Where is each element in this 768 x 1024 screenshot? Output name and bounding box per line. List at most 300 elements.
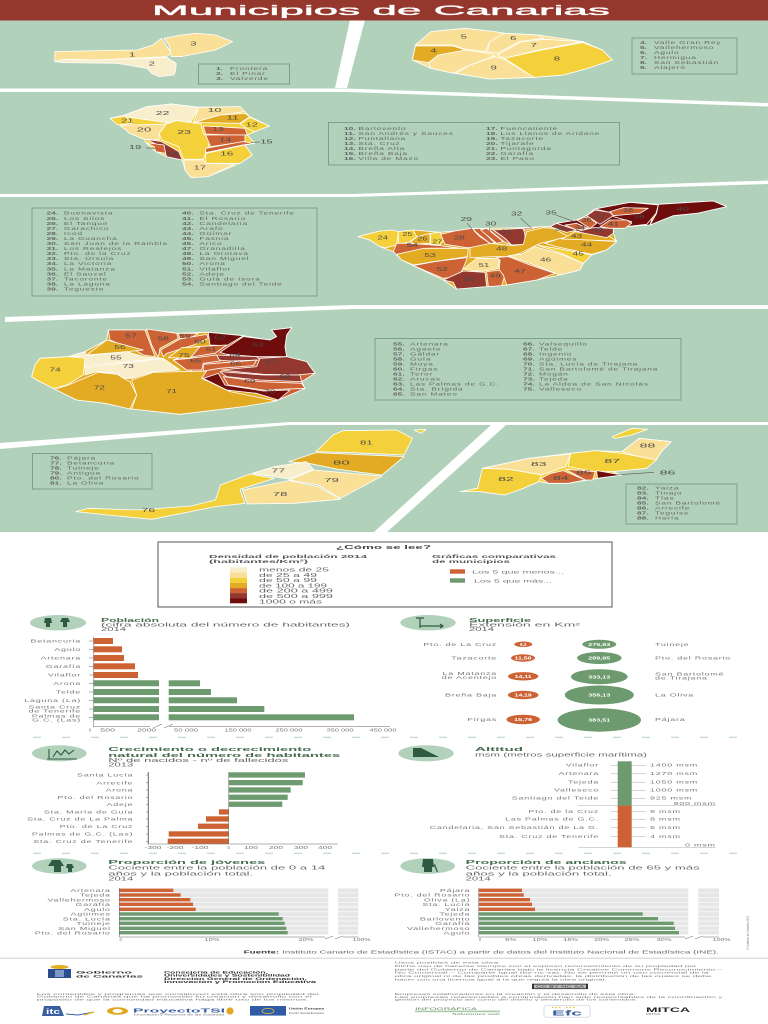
key: Gran Canaria: Agüimes bbox=[539, 357, 577, 362]
key: Tenerife: 39. bbox=[46, 287, 58, 292]
key: Lanzarote: Yaiza bbox=[655, 487, 679, 491]
right labels: La Oliva bbox=[655, 694, 694, 698]
axis values: 100% bbox=[713, 937, 731, 942]
key: La Palma: Tazacorte bbox=[500, 137, 544, 141]
key: El Hierro: 1. bbox=[216, 67, 223, 71]
key: Gran Canaria: Sta. Lucía de Tirajana bbox=[539, 362, 638, 367]
axis values: 5% bbox=[505, 937, 516, 942]
key: Tenerife: 33. bbox=[46, 257, 58, 261]
footer: Gobierno de Canarias: Universidades y Sostenibilidad bbox=[164, 973, 290, 977]
key: Tenerife: San Miguel bbox=[199, 257, 249, 261]
map background with white dividers bbox=[0, 20, 768, 532]
labels: Pájara bbox=[440, 889, 470, 893]
map: Fuerteventura: 80 bbox=[333, 460, 351, 466]
key: Tenerife: 45. bbox=[182, 237, 194, 241]
map: Tenerife: 49 bbox=[489, 273, 501, 279]
map: La Palma: 23 bbox=[177, 130, 192, 136]
altitude column bbox=[578, 761, 716, 847]
right labels: Tuineje bbox=[655, 643, 689, 647]
key: Fuerteventura: 79. bbox=[50, 471, 62, 476]
footer: Gobierno de Canarias: Gobierno bbox=[76, 969, 134, 974]
key: Tenerife: 30. bbox=[46, 242, 58, 246]
key: Tenerife: 46. bbox=[182, 242, 194, 246]
map: Tenerife: 39 bbox=[634, 215, 645, 221]
map: Tenerife: 45 bbox=[573, 252, 584, 258]
map: Tenerife: 41 bbox=[608, 222, 619, 228]
key: La Gomera: Agulo bbox=[654, 51, 679, 55]
key: Tenerife: Tegueste bbox=[64, 287, 104, 292]
values: 8 msm bbox=[650, 817, 681, 822]
values: 1000 msm bbox=[650, 789, 698, 793]
chart: crecimiento bbox=[27, 745, 340, 850]
key: La Gomera: Valle Gran Rey bbox=[654, 41, 721, 45]
key: Tenerife: Santiago del Teide bbox=[199, 282, 283, 287]
map: La Palma: 13 bbox=[212, 127, 225, 133]
logo: Infográfica: Soluciones web bbox=[452, 1012, 501, 1016]
key: La Palma: 10. bbox=[344, 127, 356, 131]
labels: Agüimes bbox=[70, 913, 111, 917]
labels: Vallehermoso bbox=[47, 898, 111, 903]
key: Tenerife: 49. bbox=[182, 257, 194, 261]
key: Gran Canaria: 72. bbox=[523, 372, 535, 377]
key: Gran Canaria: 75. bbox=[523, 387, 535, 392]
key: Tenerife: Fasnia bbox=[199, 237, 229, 241]
axis values: 2000 bbox=[137, 728, 157, 733]
values: 1400 msm bbox=[650, 764, 698, 768]
map: Tenerife: 37 bbox=[595, 215, 605, 221]
badge: creative commons bbox=[532, 984, 588, 989]
footer: uses note: hacer con una licencia igual a la que regula la obra original. bbox=[395, 977, 607, 981]
map: Lanzarote: 84 bbox=[553, 476, 569, 482]
heading: ancianos: Cociente entre la población de 65 y más bbox=[466, 866, 701, 872]
heading: superficie bbox=[469, 618, 581, 633]
icon: slope bbox=[398, 745, 454, 761]
map: Tenerife: 36 bbox=[582, 218, 592, 224]
heading: jóvenes: Proporción de jóvenes bbox=[108, 860, 265, 866]
heading: superficie: Superficie bbox=[469, 618, 533, 624]
key: Gran Canaria: San Bartolomé de Tirajana bbox=[539, 367, 658, 372]
key: Tenerife: 47. bbox=[182, 247, 194, 251]
key: Tenerife: 48. bbox=[182, 252, 194, 256]
map: Tenerife: 34 bbox=[575, 225, 585, 231]
map: El Hierro bbox=[55, 33, 233, 77]
key: Lanzarote: 83. bbox=[637, 492, 649, 496]
footer: ownership note: propósito de que la comunidad educativa haga libre uso de los mismos. bbox=[37, 997, 309, 1001]
key: Tenerife: 25. bbox=[46, 217, 58, 221]
key: Tenerife: 28. bbox=[46, 232, 58, 236]
labels: Santa Cruz bbox=[29, 705, 81, 710]
map: Gran Canaria: 65 bbox=[190, 359, 202, 365]
footer: Gobierno de Canarias bbox=[48, 965, 316, 984]
title bar: Municipios de Canarias bbox=[152, 2, 610, 18]
legend: cómo se lee: de municipios bbox=[432, 559, 511, 565]
map: Tenerife: 46 bbox=[540, 257, 552, 263]
map: Fuerteventura: 79 bbox=[324, 478, 340, 484]
footer: companies note bbox=[395, 992, 724, 1002]
map: Fuerteventura: 76 bbox=[142, 508, 156, 514]
map: Gran Canaria: 62 bbox=[214, 335, 226, 341]
heading: jóvenes: Cociente entre la población de 0 a 14 bbox=[108, 866, 326, 872]
heading: ancianos: 2014 bbox=[466, 876, 491, 882]
labels bbox=[394, 889, 470, 936]
key: Gran Canaria: 62. bbox=[393, 377, 405, 382]
footer: Gobierno de Canarias: de Canarias bbox=[76, 973, 145, 978]
values: 1050 msm bbox=[650, 780, 698, 785]
key: El Hierro: Frontera bbox=[230, 67, 268, 71]
heading: altitud: msm (metros superficie marítima) bbox=[475, 753, 648, 759]
key: Tenerife: Granadilla bbox=[199, 247, 246, 251]
left labels: Tazacorte bbox=[451, 657, 497, 661]
key: La Palma: 15. bbox=[344, 152, 356, 156]
labels: Agulo bbox=[84, 908, 111, 912]
axis values: 50 000 bbox=[174, 728, 199, 733]
key: Gran Canaria: 70. bbox=[523, 362, 535, 367]
key: Tenerife: 31. bbox=[46, 247, 58, 251]
divider dashes bbox=[33, 852, 740, 854]
right labels: Pájara bbox=[655, 718, 685, 722]
key: Tenerife: 36. bbox=[46, 272, 58, 277]
key: Gran Canaria: Firgas bbox=[410, 367, 438, 372]
key: Tenerife: 51. bbox=[182, 267, 194, 272]
key: Gran Canaria: 71. bbox=[523, 367, 535, 372]
map: Gran Canaria: 60 bbox=[194, 340, 206, 346]
key: Tenerife: El Rosario bbox=[199, 217, 246, 221]
legend: cómo se lee: de 50 a 99 bbox=[259, 578, 317, 584]
key: Gran Canaria: 56. bbox=[393, 348, 405, 352]
key: El Hierro: Valverde bbox=[230, 77, 269, 81]
axis values: 0 bbox=[228, 845, 231, 850]
key: Gran Canaria: 68. bbox=[523, 352, 535, 357]
labels: Santa Lucía bbox=[77, 774, 133, 778]
right labels: de Tirajana bbox=[655, 676, 708, 681]
logo: MITCA: MITCA bbox=[646, 1012, 660, 1016]
key: Gran Canaria: 57. bbox=[393, 352, 405, 357]
key: Fuerteventura: Antigua bbox=[67, 471, 101, 476]
key: Tenerife: 26. bbox=[46, 222, 58, 226]
map: Lanzarote: 82 bbox=[498, 477, 515, 483]
map: Gran Canaria: 56 bbox=[114, 345, 126, 351]
key: La Palma: Breña Alta bbox=[358, 147, 405, 151]
key: La Palma: 19. bbox=[486, 137, 498, 141]
axis values: 350 000 bbox=[326, 728, 354, 733]
axis values: 20% bbox=[594, 937, 609, 942]
heading: superficie: Extensión en Km² bbox=[469, 623, 581, 629]
map: El Hierro: 1 bbox=[129, 52, 136, 58]
key: La Gomera: 7. bbox=[640, 56, 647, 60]
key: Gran Canaria: San Mateo bbox=[410, 392, 458, 397]
left labels: de Acentejo bbox=[442, 676, 497, 680]
labels: Pto. de La Cruz bbox=[60, 825, 133, 829]
key: La Gomera: 4. bbox=[640, 41, 647, 45]
labels: Pto. de la Cruz bbox=[528, 810, 599, 814]
labels: Tejeda bbox=[439, 913, 470, 917]
key: Tenerife: Los Realejos bbox=[64, 247, 122, 251]
axis values: 20% bbox=[298, 937, 314, 942]
map: Tenerife: 53 bbox=[424, 253, 436, 259]
key: Tenerife: 50. bbox=[182, 262, 194, 266]
key: Lanzarote: 85. bbox=[637, 502, 649, 506]
labels: Garafía bbox=[75, 903, 111, 907]
bars bbox=[89, 637, 390, 728]
map: Tenerife: 30 bbox=[485, 221, 497, 227]
key: La Gomera: San Sebastián bbox=[654, 61, 719, 65]
map: Gran Canaria: 73 bbox=[123, 364, 134, 370]
key: Fuerteventura bbox=[32, 454, 152, 489]
map: Tenerife: 28 bbox=[454, 236, 465, 242]
key: Tenerife: Tacoronte bbox=[64, 277, 108, 282]
key: Gran Canaria: Mogán bbox=[539, 372, 569, 377]
map: Tenerife: 47 bbox=[514, 269, 526, 275]
footer: Gobierno de Canarias: Dirección General de Ordenación, bbox=[164, 977, 307, 981]
labels: G.C. (Las) bbox=[32, 718, 81, 723]
map: Gran Canaria: 69 bbox=[244, 379, 256, 385]
values: 5 msm bbox=[650, 826, 681, 830]
map: La Gomera: 6 bbox=[510, 36, 517, 42]
key: Tenerife: 54. bbox=[182, 282, 194, 287]
key: Tenerife: Icod bbox=[64, 232, 83, 236]
axis values: 30% bbox=[656, 937, 672, 942]
axis values: 150 000 bbox=[224, 728, 252, 733]
source line: Fuente: Instituto Canario de Estadística (ISTAC) a partir de datos del Instituto Nacional de Estadística (INE). bbox=[244, 950, 719, 954]
heading: población: (cifra absoluta del número de habitantes) bbox=[101, 623, 351, 629]
legend: cómo se lee: Gráficas comparativas bbox=[432, 554, 557, 560]
logo: Proyecto TSI: ProyectoTSI bbox=[133, 1009, 227, 1015]
map: La Palma: 15 bbox=[260, 139, 273, 145]
labels: Palmas de G.C. (Las) bbox=[32, 833, 133, 837]
heading: superficie: 2014 bbox=[469, 627, 494, 633]
key: La Gomera: Hermigua bbox=[654, 56, 697, 60]
map: El Hierro: 2 bbox=[149, 61, 156, 67]
key: Tenerife: San Juan de la Rambla bbox=[64, 242, 168, 246]
labels: Arrecife bbox=[96, 781, 133, 786]
key: Lanzarote: 87. bbox=[637, 512, 649, 516]
key: Gran Canaria: 60. bbox=[393, 367, 405, 372]
bubbles: más: 289,95 bbox=[588, 656, 611, 661]
key: Tenerife: 29. bbox=[46, 237, 58, 241]
labels: Santiago del Teide bbox=[512, 797, 599, 801]
labels: Oliva (La) bbox=[424, 898, 470, 903]
key: La Palma: 13. bbox=[344, 142, 356, 146]
map: Gran Canaria: 59 bbox=[179, 334, 191, 340]
labels: Tejeda bbox=[80, 894, 111, 898]
key: Tenerife: Guía de Isora bbox=[199, 277, 261, 282]
scale marks: 900 msm bbox=[673, 802, 716, 806]
logo: Unión Europea: Fondo Social Europeo bbox=[289, 1011, 325, 1015]
map: Gran Canaria: 58 bbox=[158, 336, 169, 342]
key: Fuerteventura: 81. bbox=[50, 481, 62, 486]
axis values: 250 000 bbox=[276, 728, 303, 733]
labels: Candelaria, San Sebastián de La G. bbox=[430, 826, 599, 830]
logo: ATC: itc bbox=[46, 1009, 60, 1016]
axis values: 10% bbox=[204, 937, 220, 942]
key: Tenerife: Güímar bbox=[199, 232, 232, 236]
key: Gran Canaria: Valleseco bbox=[539, 387, 582, 392]
legend: cómo se lee: de 500 a 999 bbox=[259, 594, 333, 600]
map: La Palma: 17 bbox=[194, 166, 207, 171]
axis values: 400 bbox=[318, 845, 333, 850]
key: Gran Canaria: 58. bbox=[393, 357, 405, 362]
map: La Palma: 19 bbox=[129, 145, 142, 151]
heading: ancianos: Proporción de ancianos bbox=[466, 860, 627, 866]
heading: altitud bbox=[475, 747, 648, 759]
key: La Palma: Villa de Mazo bbox=[358, 157, 419, 161]
map: Tenerife: 54 bbox=[407, 243, 418, 249]
labels: Adeje bbox=[107, 803, 133, 807]
key: La Palma: 14. bbox=[344, 147, 356, 151]
key: Fuerteventura: Betancuria bbox=[67, 461, 115, 466]
heading: jóvenes bbox=[108, 860, 326, 882]
key: La Gomera: 6. bbox=[640, 51, 647, 55]
logo: MITCA: MITCA bbox=[646, 1007, 691, 1014]
logo: Efe: Efc bbox=[552, 1010, 582, 1017]
logo: Proyecto TSI bbox=[107, 1007, 234, 1017]
labels: Sta. María de Guía bbox=[44, 811, 133, 815]
footer: companies note: gestión del proyecto así como del diseño y desarrollo de los contenidos. bbox=[395, 998, 638, 1002]
footer: companies note: Empresas colaboradoras en la creación y el desarrollo de esta obra: bbox=[395, 992, 636, 996]
map: Gran Canaria: 70 bbox=[264, 390, 276, 396]
map: La Palma: 11 bbox=[227, 115, 239, 121]
key: Tenerife: La Orotava bbox=[199, 252, 249, 256]
labels: Valleseco bbox=[554, 789, 599, 793]
map: Tenerife: 26 bbox=[417, 236, 428, 242]
divider dashes bbox=[33, 736, 740, 738]
key: Gran Canaria: Tejeda bbox=[539, 377, 569, 382]
footer: uses note: No Comercial – Compartir Igual (by-nc-sa). No se permite un uso comercial de la bbox=[395, 971, 709, 975]
key: Tenerife: 43. bbox=[182, 227, 194, 231]
footer: uses note: Usos posibles de esta obra bbox=[395, 961, 499, 965]
badge: creative commons: CC BY NC SA bbox=[536, 985, 584, 989]
heading: crecimiento: 2013 bbox=[108, 763, 134, 769]
scale marks: 0 msm bbox=[685, 844, 716, 848]
key: Tenerife: Arico bbox=[199, 242, 223, 246]
key: Tenerife: Vilaflor bbox=[199, 267, 231, 272]
map: Tenerife: 52 bbox=[437, 267, 448, 273]
key: La Palma bbox=[328, 122, 620, 165]
labels: Las Palmas de G.C. bbox=[505, 817, 599, 822]
map: Lanzarote bbox=[460, 428, 676, 495]
key: La Gomera: 8. bbox=[640, 61, 647, 65]
footer: uses note bbox=[395, 961, 723, 981]
labels: Arona bbox=[53, 682, 81, 686]
map: Fuerteventura: 78 bbox=[273, 492, 288, 498]
labels: Tuineje bbox=[76, 922, 111, 926]
key: Tenerife: 34. bbox=[46, 262, 58, 266]
labels: Vilaflor bbox=[48, 674, 81, 678]
heading: ancianos: años y la población total. bbox=[466, 871, 612, 877]
key: Fuerteventura: 78. bbox=[50, 466, 62, 471]
labels: Vilaflor bbox=[566, 764, 599, 768]
legend: cómo se lee: Densidad de población 2014 bbox=[209, 554, 368, 560]
key: Lanzarote: San Bartolomé bbox=[655, 502, 721, 506]
key: Tenerife: 44. bbox=[182, 232, 194, 236]
key: Lanzarote: 86. bbox=[637, 507, 649, 511]
axis values bbox=[89, 728, 397, 733]
key: Gran Canaria: Guía bbox=[410, 357, 431, 362]
map: Lanzarote: 86 bbox=[660, 470, 676, 476]
axis values bbox=[119, 937, 371, 942]
axis values: -300 bbox=[144, 845, 163, 850]
key: La Palma: 23. bbox=[486, 157, 498, 161]
map: Gran Canaria: 74 bbox=[49, 367, 61, 373]
map: Tenerife: 42 bbox=[593, 228, 604, 234]
axis values bbox=[479, 937, 731, 942]
map: La Gomera bbox=[412, 28, 612, 79]
credit vertical: © Gobierno de Canarias 2015 bbox=[746, 916, 750, 950]
key: Gran Canaria: Arucas bbox=[410, 377, 441, 382]
labels: Agulo bbox=[54, 648, 81, 652]
map: Lanzarote: 87 bbox=[604, 459, 621, 465]
map: Tenerife bbox=[358, 201, 727, 289]
chart: altitud bbox=[398, 745, 716, 848]
map: Gran Canaria: 75 bbox=[178, 353, 190, 359]
bubbles: menos bbox=[506, 642, 540, 724]
labels: Tejeda bbox=[568, 780, 599, 785]
legend: cómo se lee: de 25 a 49 bbox=[259, 573, 317, 579]
labels: Sta. Cruz de Tenerife bbox=[499, 835, 599, 839]
key: Fuerteventura: 80. bbox=[50, 476, 62, 481]
legend: cómo se lee: de 100 a 199 bbox=[259, 583, 327, 589]
bubbles: más: 333,13 bbox=[588, 674, 611, 679]
map: Gran Canaria: 67 bbox=[265, 360, 277, 366]
map: Tenerife: 40 bbox=[676, 207, 689, 213]
map: Tenerife: 31 bbox=[501, 230, 512, 236]
labels: Pto. del Rosario bbox=[35, 931, 111, 936]
key: Tenerife: 35. bbox=[46, 267, 58, 272]
key: Tenerife: Garachico bbox=[64, 227, 109, 231]
chart: jóvenes bbox=[32, 858, 371, 942]
left labels: La Matanza bbox=[443, 672, 497, 676]
key: Gran Canaria: 65. bbox=[393, 392, 405, 397]
values: 9 msm bbox=[650, 810, 681, 814]
logo: Infográfica bbox=[415, 1006, 501, 1016]
legend: cómo se lee: de 200 a 499 bbox=[259, 589, 333, 595]
key: Tenerife: 41. bbox=[182, 217, 194, 221]
bars bbox=[479, 888, 719, 939]
key: La Palma: Barlovento bbox=[358, 127, 406, 131]
key: Tenerife: 53. bbox=[182, 277, 194, 282]
key: Fuerteventura: 77. bbox=[50, 461, 62, 466]
key: Gran Canaria: 55. bbox=[393, 343, 405, 347]
map: La Palma: 12 bbox=[246, 123, 259, 128]
key: El Hierro bbox=[198, 64, 290, 84]
key: Tenerife: Candelaria bbox=[199, 222, 248, 226]
logo: Efe bbox=[544, 1006, 590, 1017]
axis values: 15% bbox=[563, 937, 578, 942]
bubbles: menos: 6,3 bbox=[520, 642, 527, 647]
key: La Palma: San Andrés y Sauces bbox=[358, 132, 454, 136]
key: Gran Canaria: 64. bbox=[393, 387, 405, 392]
map: La Palma: 16 bbox=[220, 151, 234, 157]
map: Lanzarote: 88 bbox=[640, 444, 656, 449]
key: Fuerteventura: 76. bbox=[50, 456, 62, 461]
key: Lanzarote: 82. bbox=[637, 487, 649, 491]
key: Gran Canaria: 73. bbox=[523, 377, 535, 382]
labels: Vallehermoso bbox=[407, 927, 470, 931]
map: La Palma: 20 bbox=[137, 127, 152, 133]
key: Gran Canaria: Moya bbox=[410, 362, 434, 367]
key: La Gomera: 9. bbox=[640, 66, 647, 70]
key: Fuerteventura: La Oliva bbox=[67, 481, 104, 486]
footer: ownership note bbox=[37, 992, 320, 1001]
labels: San Miguel bbox=[58, 927, 111, 931]
map: Tenerife: 48 bbox=[496, 246, 508, 252]
map: La Palma bbox=[110, 104, 273, 178]
key: Lanzarote: Tías bbox=[655, 497, 675, 501]
bubbles: menos: 11,56 bbox=[514, 656, 532, 661]
scale marks bbox=[673, 802, 716, 848]
key: Tenerife: 42. bbox=[182, 222, 194, 226]
labels bbox=[27, 774, 133, 844]
